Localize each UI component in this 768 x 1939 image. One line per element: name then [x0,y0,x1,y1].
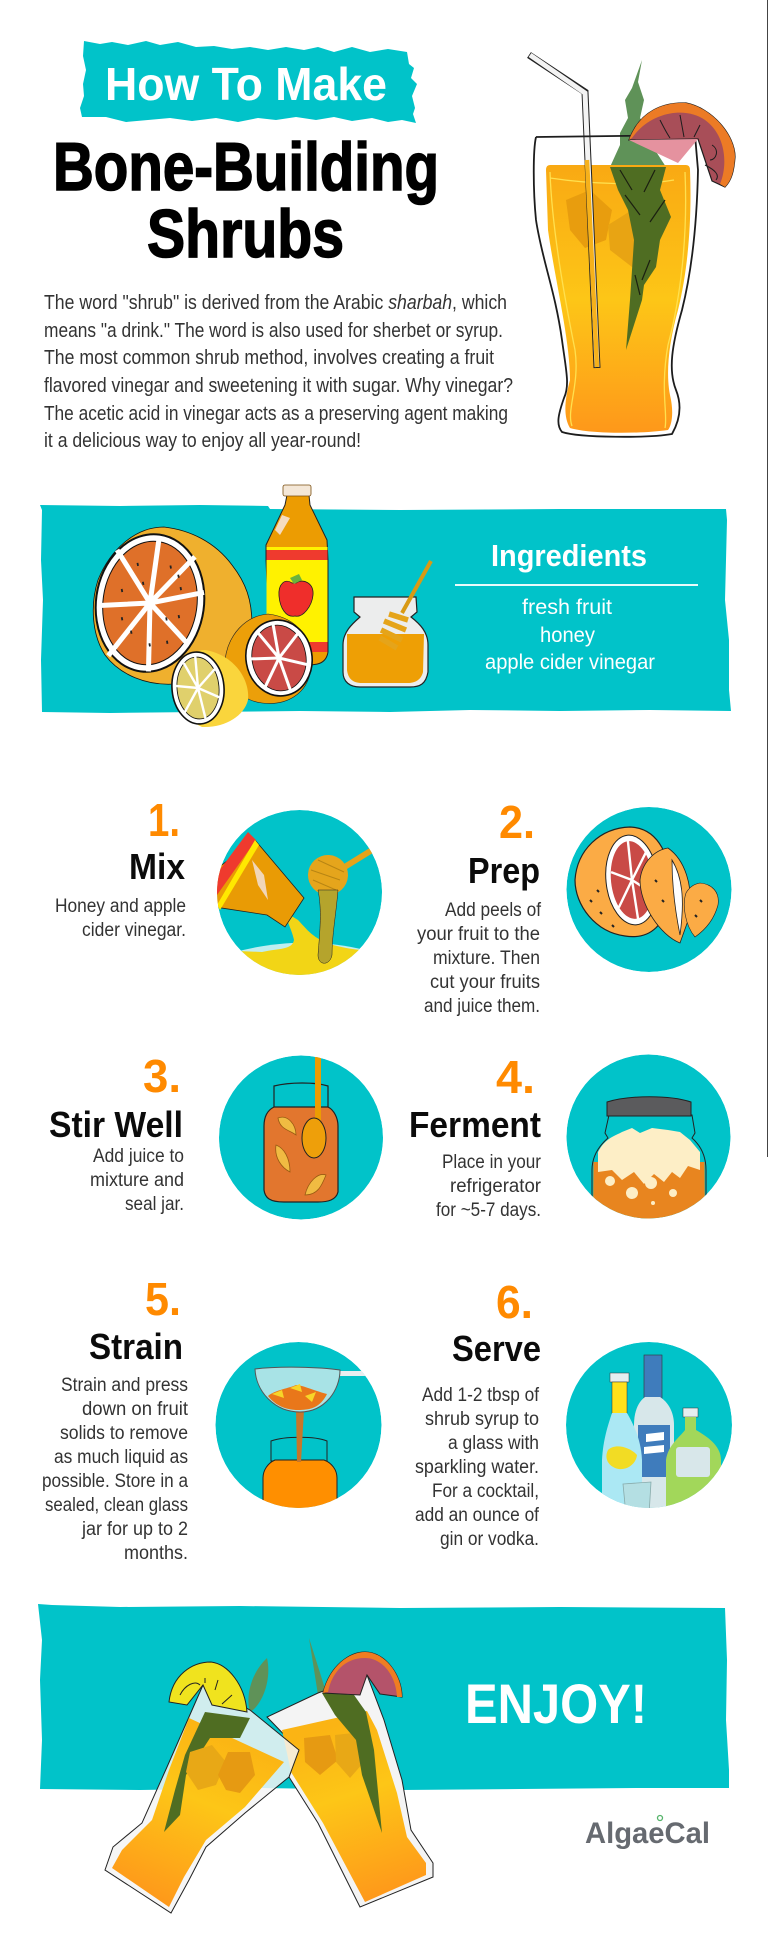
ice cubes [186,1745,226,1790]
bowl contents [241,916,359,975]
description [90,1146,184,1215]
circle illustration: pouring honey and vinegar [215,810,382,980]
orange rind [93,527,252,684]
heading: Ferment [409,1104,541,1145]
teal disc [566,1342,732,1508]
title: Bone-Building Shrubs [53,129,439,272]
liquid highlights [550,172,686,428]
vinegar bottle [266,485,328,665]
spoon [315,1057,321,1122]
header banner: How To Make [80,41,417,123]
description: Place in your [442,1152,542,1173]
glass body [105,1685,299,1913]
description: gin or vodka. [440,1529,539,1550]
peel 1 [640,848,691,943]
description: possible. Store in a [42,1471,188,1492]
bowl rim [241,943,360,960]
number: 6. [496,1276,533,1328]
bubbles [605,1176,677,1205]
title line 1: Bone-Building [53,129,439,205]
rosemary in liquid [610,167,671,350]
fruit pieces [276,1117,326,1195]
panel: enjoy [38,1604,729,1913]
lemon rind [175,650,248,727]
honey drip [318,890,338,963]
heading: Strain [89,1326,183,1367]
description: Add juice to [93,1146,184,1167]
dipper handle [343,850,372,868]
intro paragraph: The word "shrub" is derived from the Arabic sharbah, which [44,292,507,314]
intro paragraph: it a delicious way to enjoy all year-round! [44,430,361,452]
description: mixture. Then [433,948,540,969]
intro paragraph [44,292,513,452]
illustration: shrub cocktail glass [529,55,735,437]
teal disc [566,1054,730,1218]
glass outline [534,135,698,437]
grapefruit half [225,614,318,703]
description: sparkling water. [415,1457,539,1478]
description: refrigerator [450,1176,542,1197]
leaf [248,1658,268,1712]
step 4: Ferment [409,1051,730,1225]
teal brush panel [40,505,731,713]
logo wordmark: AlgaeCal [585,1817,710,1850]
glass body [267,1675,433,1907]
dipper head [308,855,348,892]
description: months. [124,1543,188,1564]
jar neck [274,1083,328,1108]
description: shrub syrup to [425,1409,539,1430]
liquid [282,1711,426,1902]
description [55,896,186,941]
liquid [112,1718,284,1907]
strained fruit [268,1385,327,1410]
intro paragraph: The acetic acid in vinegar acts as a preserving agent making [44,403,508,425]
circle illustration: bottles [566,1342,732,1515]
rosemary [322,1693,382,1833]
jar lid [607,1097,691,1116]
honey fill [347,634,424,683]
strainer handle [340,1371,366,1376]
grapefruit rind [575,827,670,937]
teal disc [217,810,382,975]
grapefruit face [605,834,652,926]
description [415,1385,540,1550]
ingredients list [485,596,655,674]
step 6: Serve [415,1276,732,1550]
logo: AlgaeCal [585,1816,710,1850]
description: and juice them. [424,996,540,1017]
description [42,1375,189,1564]
description: solids to remove [60,1423,188,1444]
jar glass [343,597,428,687]
ingredients divider [455,584,698,586]
description: Strain and press [61,1375,188,1396]
number: 5. [145,1273,181,1325]
step 1: Mix [55,794,382,980]
description: For a cocktail, [432,1481,539,1502]
description [417,900,542,1017]
apple [279,581,313,616]
teal disc [216,1342,382,1508]
step 5: Strain [42,1273,382,1564]
bottle cap [283,485,311,496]
teal disc [219,1056,383,1220]
description [436,1152,542,1221]
description: add an ounce of [415,1505,540,1526]
heading: Prep [468,850,540,891]
intro paragraph: means "a drink." The word is also used for sherbet or syrup. [44,320,503,342]
strainer bowl [255,1367,340,1412]
illustration: left glass [105,1658,299,1913]
heading: Stir Well [49,1104,183,1145]
big orange [87,527,252,684]
teal brush panel [38,1604,729,1790]
number: 1. [148,794,180,846]
circle illustration: grapefruit and peels [566,807,732,972]
description: a glass with [448,1433,539,1454]
rosemary above liquid [610,60,666,167]
lemon half [169,650,248,727]
step 3: Stir Well [49,1050,383,1220]
foam [598,1128,700,1184]
description: Add 1-2 tbsp of [422,1385,540,1406]
highlight [275,515,290,535]
teal disc [566,807,732,972]
juice stream [296,1410,304,1462]
description: as much liquid as [54,1447,188,1468]
description: cut your fruits [430,972,540,993]
jar body [264,1107,338,1202]
jar neck and shoulders [592,1115,706,1225]
panel: ingredients [40,485,731,727]
brush stroke background [80,41,417,123]
rosemary right [309,1638,360,1715]
step 2: Prep [417,796,732,1017]
description: seal jar. [125,1194,184,1215]
bottle label [266,547,328,652]
ice cubes [304,1735,338,1775]
ice cubes [566,190,612,248]
jar contents [593,1162,705,1218]
heading: How To Make: How To Make [105,58,387,110]
description: down on fruit [82,1399,189,1420]
jar body [262,1460,338,1508]
liquid [546,165,690,433]
small glass [623,1482,651,1515]
ingredients list: fresh fruit [522,596,612,619]
green bottle [666,1408,721,1515]
orange face [87,527,213,679]
ingredients list: apple cider vinegar [485,651,655,674]
illustration: right glass [267,1638,433,1907]
intro paragraph: flavored vinegar and sweetening it with sugar. Why vinegar? [44,375,513,397]
description: Honey and apple [55,896,186,917]
description: jar for up to 2 [81,1519,188,1540]
title line 2: Shrubs [147,196,344,272]
number: 4. [496,1051,535,1103]
ingredients list: honey [540,624,595,647]
yellow-neck bottle [602,1373,642,1515]
intro paragraph: The most common shrub method, involves creating a fruit [44,347,494,369]
page edge rule [767,0,768,1157]
grapefruit rind [225,614,311,703]
blood orange slice [629,103,735,187]
ingredients heading: Ingredients [491,538,647,573]
lemon slice [169,1662,247,1712]
dipper [402,561,431,613]
description: your fruit to the [417,924,540,945]
description: mixture and [90,1170,184,1191]
honey jar [343,561,431,687]
vinegar bottle [215,840,304,927]
jar neck [271,1437,327,1461]
circle illustration: fermenting jar [566,1054,730,1225]
heading: Mix [129,846,185,887]
heading: Serve [452,1328,541,1369]
circle illustration: stirring the jar [219,1056,383,1220]
straw [529,55,597,368]
peel 2 [684,883,718,937]
enjoy text: ENJOY! [465,1672,647,1735]
number: 3. [143,1050,181,1102]
blue-label bottle [634,1355,674,1515]
description: cider vinegar. [82,920,186,941]
blood orange slice [323,1652,402,1697]
rosemary [164,1712,250,1832]
logo dot [658,1816,662,1820]
number: 2. [499,796,535,848]
description: for ~5-7 days. [436,1200,541,1221]
circle illustration: straining into jar [216,1342,382,1515]
bottle body [266,495,328,665]
description: Add peels of [445,900,542,921]
description: sealed, clean glass [45,1495,188,1516]
